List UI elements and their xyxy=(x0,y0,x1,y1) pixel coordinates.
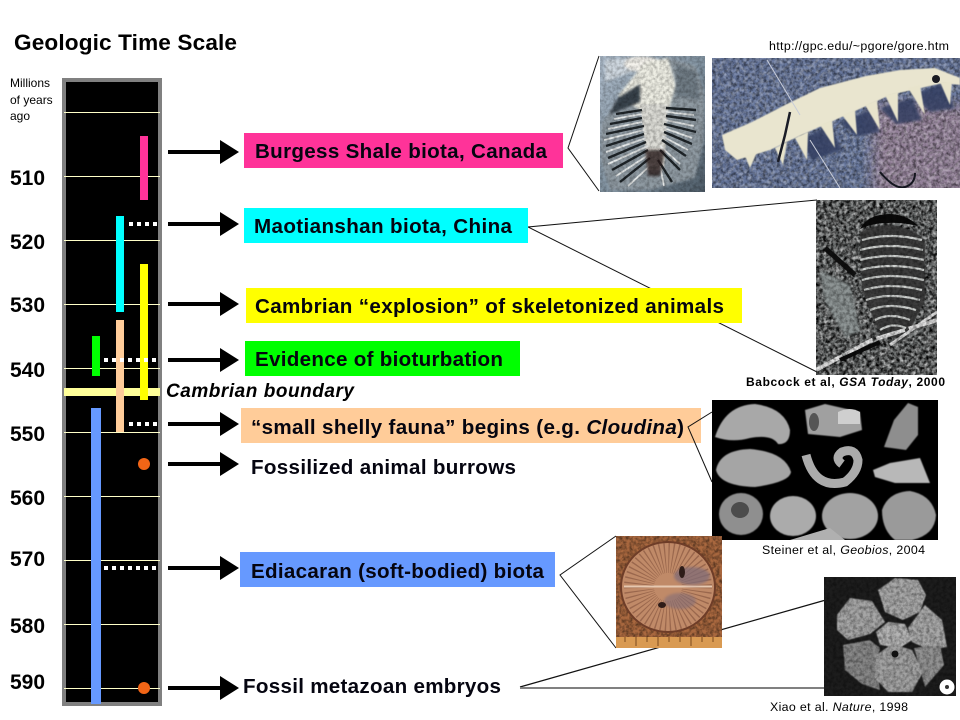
axis unit label: of years xyxy=(10,93,53,107)
axis unit label: ago xyxy=(10,109,30,123)
photo: Maotianshan trilobite fossil xyxy=(816,200,937,375)
Cambrian boundary band xyxy=(64,388,160,396)
title: Geologic Time Scale xyxy=(14,30,237,55)
arrow: Ediacaran xyxy=(168,556,239,580)
embryo connector line, grey xyxy=(520,687,824,689)
label: Cambrian explosion xyxy=(246,288,742,323)
range bar: Maotianshan xyxy=(116,216,124,312)
arrow: explosion xyxy=(168,292,239,316)
arrow: animal burrows xyxy=(168,452,239,476)
credit: Steiner: Steiner et al, Geobios, 2004 xyxy=(762,543,925,557)
label: bioturbation xyxy=(245,341,520,376)
label: Ediacaran biota: Ediacaran (soft-bodied) biota xyxy=(251,560,545,583)
range bar: small shelly fauna xyxy=(116,320,124,432)
credit: Babcock: Babcock et al, GSA Today, 2000 xyxy=(746,375,945,389)
label: Maotianshan biota xyxy=(244,208,528,243)
axis year labels: 570 xyxy=(10,548,45,571)
axis unit label xyxy=(10,76,53,123)
time scale column xyxy=(64,80,160,704)
Cambrian boundary label: Cambrian boundary xyxy=(166,381,355,402)
connector lines xyxy=(520,56,824,687)
label: small shelly fauna: “small shelly fauna” begins (e.g. Cloudina) xyxy=(251,416,684,439)
source url: http://gpc.edu/~pgore/gore.htm xyxy=(769,39,949,53)
label: bioturbation: Evidence of bioturbation xyxy=(255,348,503,371)
range bar: Ediacaran xyxy=(91,408,101,704)
axis year labels: 550 xyxy=(10,423,45,446)
axis year labels: 590 xyxy=(10,671,45,694)
label: Ediacaran biota xyxy=(240,552,555,587)
range bar: skeletonized animals xyxy=(140,264,148,400)
arrow: Burgess Shale xyxy=(168,140,239,164)
axis year labels: 580 xyxy=(10,615,45,638)
photo: Ediacaran disc fossil xyxy=(616,536,722,648)
photo: small shelly fossils xyxy=(712,400,938,540)
label: Burgess Shale biota: Burgess Shale biota, Canada xyxy=(255,140,548,163)
credit: Xiao: Xiao et al. Nature, 1998 xyxy=(770,700,908,714)
label: metazoan embryos: Fossil metazoan embryos xyxy=(243,675,501,698)
photo: trilobite fossil xyxy=(600,56,705,192)
arrow: Maotianshan xyxy=(168,212,239,236)
label: Maotianshan biota: Maotianshan biota, China xyxy=(254,215,513,238)
point: metazoan embryos xyxy=(138,682,150,694)
label: Burgess Shale biota xyxy=(244,133,563,168)
label: animal burrows: Fossilized animal burrows xyxy=(251,456,516,479)
dotted extension lines xyxy=(104,224,160,568)
axis year labels: 520 xyxy=(10,231,45,254)
axis year labels: 560 xyxy=(10,487,45,510)
photo: fossil embryo xyxy=(824,577,956,696)
arrow: small shelly fauna xyxy=(168,412,239,436)
label: small shelly fauna xyxy=(241,408,701,443)
axis year labels: 540 xyxy=(10,359,45,382)
axis year labels: 530 xyxy=(10,294,45,317)
label: Cambrian explosion: Cambrian “explosion” of skeletonized animals xyxy=(255,295,724,318)
arrow: bioturbation xyxy=(168,348,239,372)
axis year labels: 510 xyxy=(10,167,45,190)
connector: small shelly fauna to photo xyxy=(688,412,712,482)
point: animal burrows xyxy=(138,458,150,470)
arrow: metazoan embryos xyxy=(168,676,239,700)
range bar: Burgess Shale xyxy=(140,136,148,200)
range bar: bioturbation xyxy=(92,336,100,376)
photo: Burgess arthropod fossil xyxy=(712,58,960,188)
axis year labels xyxy=(10,167,45,694)
axis unit label: Millions xyxy=(10,76,50,90)
